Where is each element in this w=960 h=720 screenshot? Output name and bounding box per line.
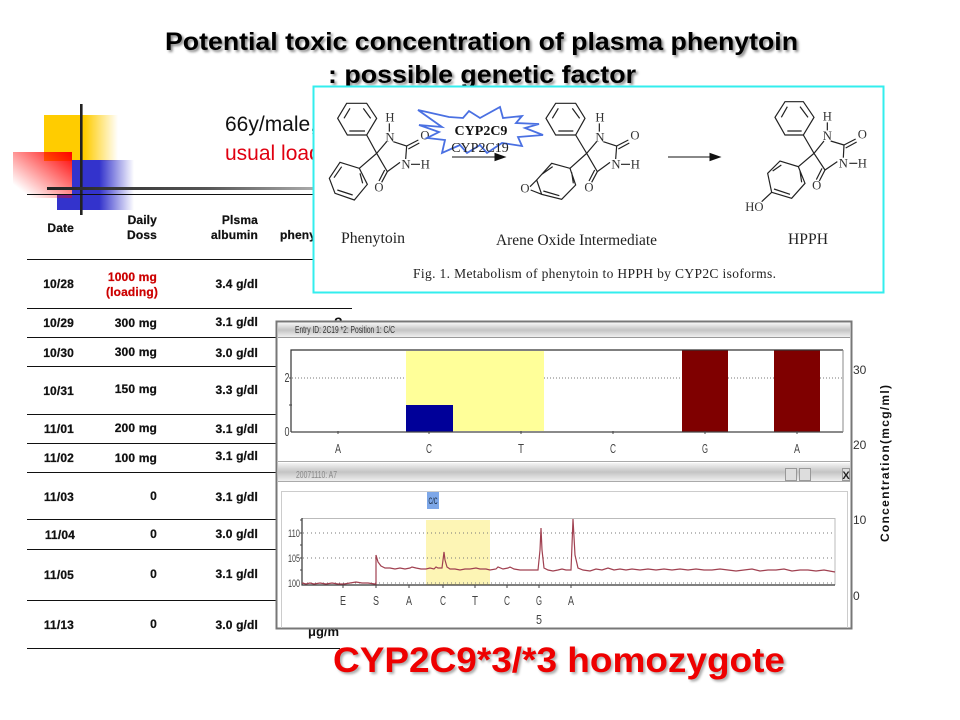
- bar chart: pyrogram histogram: 2: [284, 370, 290, 385]
- table rows: 11/13: [44, 618, 74, 632]
- line chart: pyrogram trace: T: [472, 593, 478, 608]
- arrow: intermediate to HPPH: [668, 154, 720, 160]
- axis ticks: 20: [853, 438, 867, 452]
- window bar: entry: Entry ID: 2C19 *2: Position 1: C/C: [295, 325, 395, 336]
- genotype badge: C/C: [428, 496, 438, 506]
- line chart: pyrogram trace: 100: [288, 578, 300, 590]
- arrow: phenytoin to intermediate: [452, 154, 505, 160]
- table rows: 3.1 g/dl: [215, 449, 258, 463]
- table rows: 200 mg: [115, 421, 157, 435]
- window buttons: X: [842, 470, 850, 482]
- label: Phenytoin: Phenytoin: [341, 230, 405, 247]
- table rows: (loading): [106, 285, 158, 299]
- line chart: pyrogram trace: C: [504, 593, 510, 608]
- table header: albumin: [211, 228, 258, 242]
- table header: [47, 213, 339, 242]
- bar chart: pyrogram histogram: A: [794, 441, 800, 456]
- label: Arene Oxide Intermediate: Arene Oxide Intermediate: [496, 232, 657, 249]
- table rows: 0: [150, 489, 157, 503]
- bar chart: pyrogram histogram: T: [518, 441, 524, 456]
- table rows: 11/03: [44, 490, 74, 504]
- bar chart: pyrogram histogram: A: [335, 441, 341, 456]
- axis ticks: 0: [853, 589, 860, 603]
- table header: Doss: [127, 228, 157, 242]
- molecule: HPPH: [745, 102, 867, 214]
- molecule: arene oxide intermediate: N: [611, 157, 621, 171]
- table rows: 3.1 g/dl: [215, 422, 258, 436]
- bar chart: pyrogram histogram: C: [610, 441, 616, 456]
- table rows: 11/02: [44, 451, 74, 465]
- window buttons: [786, 468, 850, 482]
- title: [165, 28, 798, 89]
- table rows: 3.0 g/dl: [215, 618, 258, 632]
- icon: enzyme starburst: [418, 107, 543, 153]
- table header: Date: [47, 221, 74, 235]
- table rows: 100 mg: [115, 451, 157, 465]
- line chart: pyrogram trace: A: [406, 593, 412, 608]
- molecule: arene oxide intermediate: O: [584, 181, 594, 195]
- molecule: phenytoin: H: [385, 111, 395, 125]
- window bar: entry: [278, 323, 850, 338]
- table rows: 3.1 g/dl: [215, 567, 258, 581]
- table: dosing and albumin: [27, 194, 352, 648]
- table rows: [43, 270, 258, 632]
- panel: phenytoin metabolism: [314, 86, 884, 292]
- table header: phenytoin: [280, 228, 339, 242]
- molecule: HPPH: O: [858, 127, 867, 141]
- concentration axis: [853, 363, 892, 603]
- table rows: 3.0 g/dl: [215, 346, 258, 360]
- table rows: 11/04: [45, 528, 75, 542]
- table rows: 3.0 g/dl: [215, 527, 258, 541]
- molecule: phenytoin: O: [420, 128, 430, 142]
- axis ticks: 10: [853, 513, 867, 527]
- molecule: phenytoin: [329, 103, 430, 200]
- line chart: pyrogram trace: S: [373, 593, 379, 608]
- bar chart: pyrogram histogram: 0: [284, 424, 290, 439]
- molecule: HPPH: H: [858, 156, 867, 170]
- molecule: arene oxide intermediate: H: [631, 157, 640, 171]
- axis ticks: [853, 363, 867, 603]
- panel: genotyping software window: [276, 322, 852, 628]
- line chart: pyrogram trace: [288, 518, 835, 627]
- table header: Plsma: [222, 213, 258, 227]
- table rows: 3.3 g/dl: [215, 383, 258, 397]
- molecule: arene oxide intermediate: H: [595, 111, 605, 125]
- molecule: arene oxide intermediate: O: [520, 182, 530, 196]
- line chart: pyrogram trace: 5: [536, 612, 542, 627]
- table rows: 11/05: [44, 568, 74, 582]
- line chart: pyrogram trace: G: [536, 593, 542, 608]
- molecule: arene oxide intermediate: N: [595, 131, 605, 145]
- table rows: 11/01: [44, 422, 74, 436]
- table rows: 3.1 g/dl: [215, 315, 258, 329]
- molecule: arene oxide intermediate: O: [630, 128, 640, 142]
- molecule: HPPH: HO: [745, 200, 763, 214]
- bar chart: pyrogram histogram: C: [426, 441, 432, 456]
- figure caption: Fig. 1. Metabolism of phenytoin to HPPH by CYP2C isoforms.: [413, 266, 776, 281]
- table rows: 10/29: [43, 316, 74, 330]
- enzyme label: CYP2C9: CYP2C9: [455, 124, 507, 139]
- line chart: pyrogram trace: E: [340, 593, 346, 608]
- axis ticks: 30: [853, 363, 867, 377]
- partly hidden unit: μg/m: [308, 624, 339, 639]
- window bar: sample: [278, 462, 850, 482]
- partly hidden value: ?: [334, 314, 343, 330]
- table rows: 3.4 g/dl: [215, 277, 258, 291]
- table rows: 3.1 g/dl: [215, 490, 258, 504]
- table rows: 10/30: [43, 346, 74, 360]
- title: Potential toxic concentration of plasma phenytoin: [165, 28, 798, 56]
- molecule: HPPH: N: [823, 129, 832, 143]
- line chart: pyrogram trace: C: [440, 593, 446, 608]
- conclusion: CYP2C9*3/*3 homozygote: [333, 641, 785, 680]
- table rows: 300 mg: [115, 345, 157, 359]
- bar chart: pyrogram histogram: [284, 350, 843, 456]
- molecule: phenytoin: H: [421, 157, 430, 171]
- title: : possible genetic factor: [328, 61, 636, 89]
- line chart: pyrogram trace: A: [568, 593, 574, 608]
- patient summary text: usual loading: [225, 142, 349, 165]
- molecule: phenytoin: N: [401, 157, 411, 171]
- molecule: HPPH: H: [823, 110, 832, 124]
- molecule: phenytoin: N: [385, 131, 395, 145]
- molecule: arene oxide intermediate: [520, 103, 640, 199]
- table rows: 10/31: [43, 384, 74, 398]
- line chart: pyrogram trace: 105: [288, 553, 300, 565]
- table header: Daily: [128, 213, 157, 227]
- molecule: HPPH: N: [839, 156, 848, 170]
- bar chart: pyrogram histogram: G: [702, 441, 708, 456]
- window bar: sample: 20071110: A7: [296, 470, 337, 481]
- molecule: HPPH: O: [812, 179, 821, 193]
- patient summary text: [225, 113, 349, 165]
- enzyme label: CYP2C19: CYP2C19: [451, 141, 509, 156]
- genotype badge: [427, 492, 439, 509]
- decorative colour blocks: [13, 104, 313, 215]
- table rows: 0: [150, 527, 157, 541]
- table rows: 300 mg: [115, 316, 157, 330]
- table rows: 0: [150, 567, 157, 581]
- table rows: 0: [150, 617, 157, 631]
- molecule: phenytoin: O: [374, 181, 384, 195]
- table rows: 10/28: [43, 277, 74, 291]
- patient summary text: 66y/male,: [225, 113, 316, 136]
- line chart: pyrogram trace: 110: [288, 528, 300, 540]
- pyrogram frame: [282, 491, 848, 628]
- table rows: 150 mg: [115, 382, 157, 396]
- table rows: 1000 mg: [108, 270, 157, 284]
- label: HPPH: HPPH: [788, 231, 828, 248]
- axis title: Concentration(mcg/ml): [878, 385, 892, 542]
